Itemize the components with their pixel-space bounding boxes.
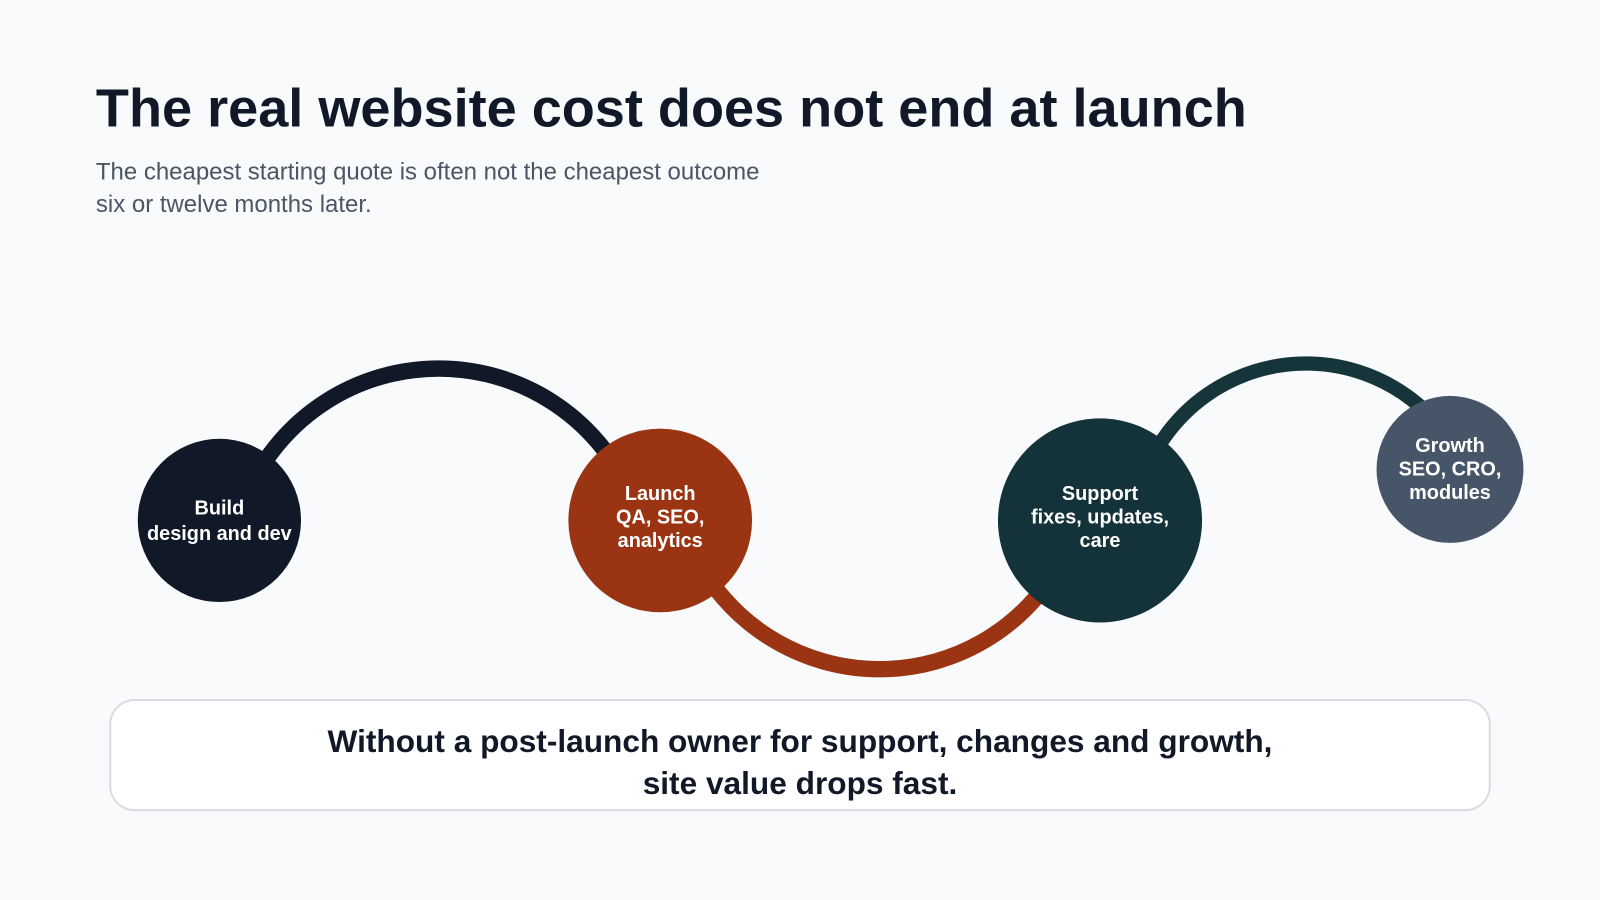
stage: growth: Growth bbox=[1415, 435, 1485, 457]
stage: build: design and dev bbox=[147, 523, 292, 545]
title: The real website cost does not end at launch bbox=[96, 79, 1247, 139]
stage: launch: analytics bbox=[618, 530, 703, 552]
subtitle: six or twelve months later. bbox=[96, 191, 372, 218]
stage: support bbox=[998, 418, 1202, 622]
callout box bbox=[110, 700, 1490, 810]
subtitle: The cheapest starting quote is often not the cheapest outcome bbox=[96, 159, 759, 186]
stage: launch bbox=[568, 429, 752, 612]
arrow: support to growth arc bbox=[1143, 364, 1469, 480]
stage: build bbox=[138, 439, 301, 602]
stage: build: Build bbox=[195, 497, 244, 519]
callout box: site value drops fast. bbox=[643, 765, 957, 801]
callout box: Without a post-launch owner for support, changes and growth, bbox=[328, 723, 1272, 759]
arrow: build to launch arc bbox=[249, 369, 629, 490]
stage: support: fixes, updates, bbox=[1031, 506, 1169, 528]
stage: launch: Launch bbox=[625, 483, 696, 505]
stage: growth: modules bbox=[1409, 482, 1491, 504]
stage: support: Support bbox=[1062, 483, 1138, 505]
stage: growth bbox=[1377, 396, 1523, 543]
arrow: launch to support arc bbox=[693, 551, 1066, 669]
stage: support: care bbox=[1080, 530, 1120, 552]
subtitle bbox=[96, 159, 759, 218]
stage: growth: SEO, CRO, bbox=[1399, 459, 1501, 481]
stage: launch: QA, SEO, bbox=[616, 506, 704, 528]
